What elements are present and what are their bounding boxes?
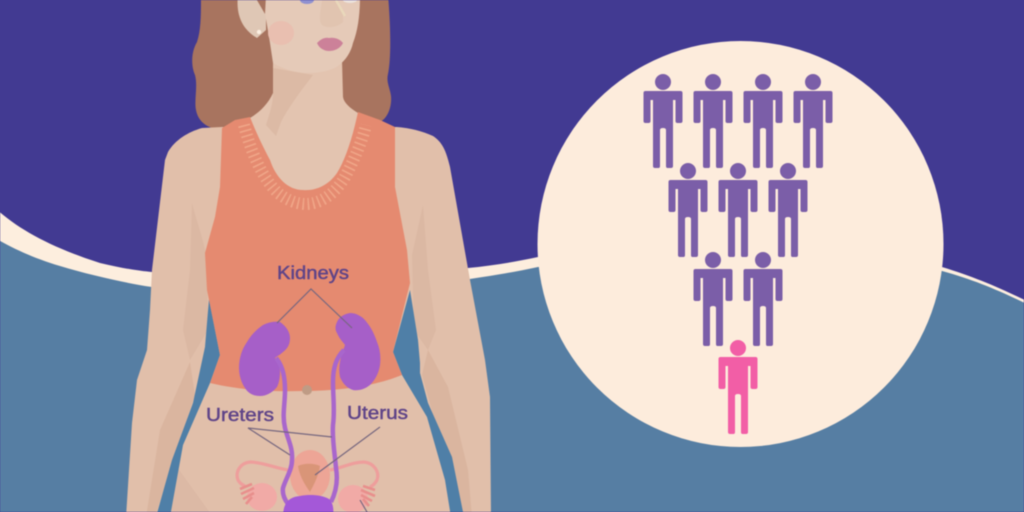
lower right leader bbox=[360, 500, 367, 512]
pink person bbox=[718, 340, 758, 434]
leader lines bbox=[248, 289, 380, 512]
cheek blush bbox=[268, 21, 294, 45]
hip shading bbox=[170, 467, 213, 512]
face bbox=[258, 0, 360, 73]
row 3 people bbox=[694, 252, 782, 346]
background: blue wave bbox=[0, 238, 1024, 512]
left ureter bbox=[276, 358, 292, 504]
arm shading: right lower bbox=[422, 350, 472, 512]
pictogram group: purple people and one pink person bbox=[644, 74, 832, 434]
tank top bbox=[205, 112, 410, 391]
arm shading: left lower bbox=[146, 362, 195, 512]
gap left of torso bbox=[156, 299, 220, 512]
ear and earring bbox=[238, 0, 266, 38]
hair over temple bbox=[254, 0, 266, 14]
label: Kidneys: Kidneys bbox=[277, 263, 349, 283]
right ovary bbox=[338, 485, 368, 512]
neck shadow bbox=[266, 68, 313, 136]
ureters leader bbox=[248, 428, 332, 455]
row 2 people bbox=[668, 163, 808, 257]
eyes and brows bbox=[300, 0, 357, 16]
nose bbox=[320, 0, 343, 27]
label: Ureters: Ureters bbox=[206, 405, 274, 425]
left fimbriae bbox=[240, 484, 254, 504]
left kidney bbox=[239, 322, 290, 396]
left fallopian tube bbox=[237, 462, 288, 486]
right fallopian tube bbox=[330, 462, 378, 487]
circle panel bbox=[538, 41, 944, 447]
bladder bbox=[283, 495, 333, 512]
hair bbox=[192, 0, 391, 128]
belly button bbox=[302, 385, 312, 395]
body silhouette: shoulders, arms, hips bbox=[126, 127, 491, 512]
gap right of torso bbox=[393, 290, 464, 512]
woman figure bbox=[126, 0, 491, 512]
right fimbriae bbox=[361, 486, 375, 506]
arm shading: right upper bbox=[412, 205, 436, 350]
left ovary bbox=[247, 483, 277, 511]
row 1 people bbox=[644, 74, 832, 168]
uterus leader bbox=[315, 427, 380, 475]
kidneys leader bbox=[277, 289, 352, 328]
arm shading: left upper bbox=[183, 203, 208, 360]
right kidney bbox=[336, 313, 380, 390]
background: cream wave band bbox=[0, 208, 1024, 512]
reproductive organs bbox=[237, 450, 378, 512]
uterus bbox=[298, 464, 320, 492]
label: Uterus: Uterus bbox=[347, 403, 408, 423]
lips bbox=[317, 38, 343, 51]
right ureter bbox=[331, 350, 344, 502]
uterus halo bbox=[290, 450, 330, 500]
neck bbox=[245, 55, 366, 198]
tank neckline ribbing bbox=[244, 125, 366, 204]
